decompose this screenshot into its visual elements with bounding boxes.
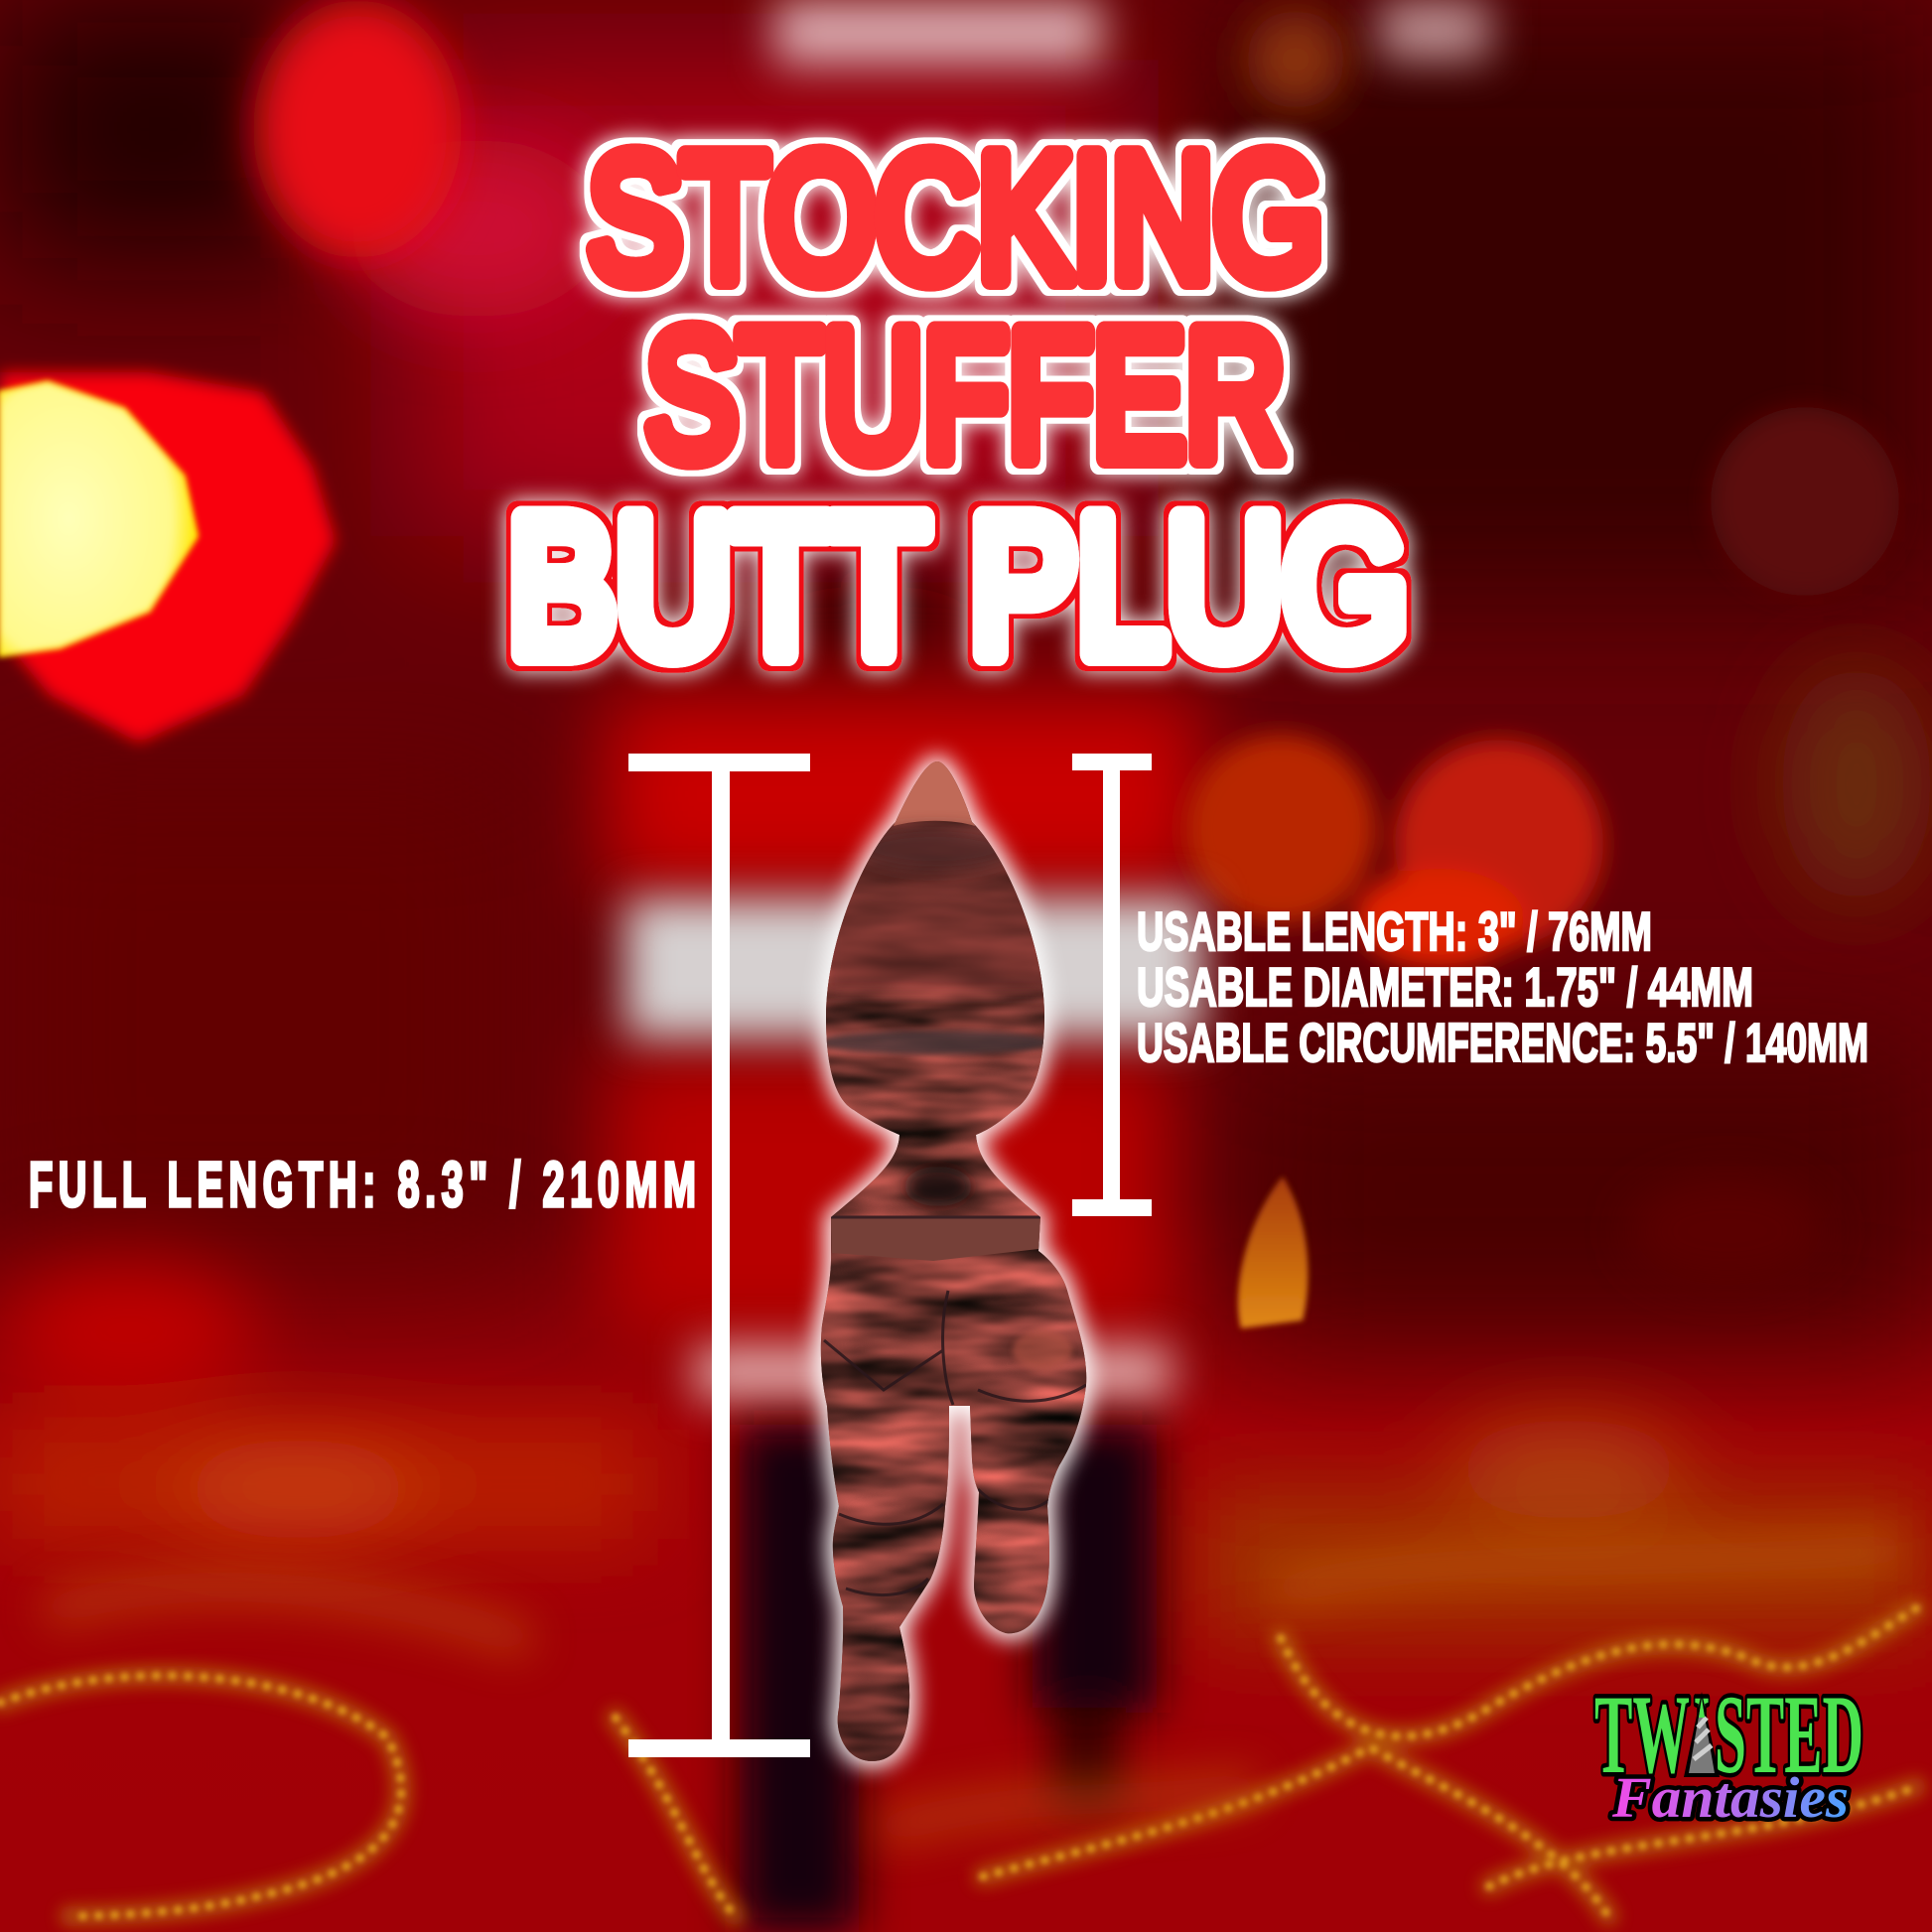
soft round bokeh discs — [1186, 407, 1899, 968]
logo: Twisted Fantasies — [1594, 1673, 1863, 1830]
product knee highlight — [1013, 1330, 1072, 1370]
product neck shadow — [904, 1167, 972, 1206]
measure bar: full length — [628, 754, 810, 1757]
product bulb dark band — [856, 827, 1015, 871]
logo word: Twisted: I — [1694, 1673, 1710, 1797]
label: full length: FULL LENGTH: 8.3" / 210MM — [29, 1151, 696, 1220]
logo word: Fantasies: Fantasies — [1611, 1765, 1849, 1830]
logo word: Twisted: TW — [1594, 1673, 1690, 1797]
dark post behind product — [740, 1425, 1157, 1932]
product upper bulb tone — [824, 824, 1052, 993]
title line 3: BUTT PLUG — [508, 477, 1408, 695]
title: Stocking Stuffer Butt Plug — [508, 118, 1408, 695]
usable length: USABLE LENGTH: 3" / 76MM — [1137, 900, 1652, 962]
title line 2: STUFFER — [645, 292, 1286, 496]
title line 1: STOCKING — [588, 118, 1323, 318]
white blurred bands — [625, 0, 1489, 1400]
logo word: Twisted — [1594, 1673, 1863, 1797]
logo icon: twisted spiral — [1684, 1692, 1720, 1777]
product creases — [824, 1291, 1086, 1595]
product: festive figure-shaped item — [804, 745, 1102, 1777]
blurred red and orange lights — [253, 0, 1827, 1286]
product tip — [894, 757, 975, 826]
usable specifications — [1137, 900, 1868, 1073]
golden beaded trim — [0, 1549, 1916, 1916]
product flange — [831, 1217, 1040, 1261]
measure bar: usable length — [1072, 754, 1152, 1216]
bokeh light: yellow and red — [0, 372, 1308, 1328]
